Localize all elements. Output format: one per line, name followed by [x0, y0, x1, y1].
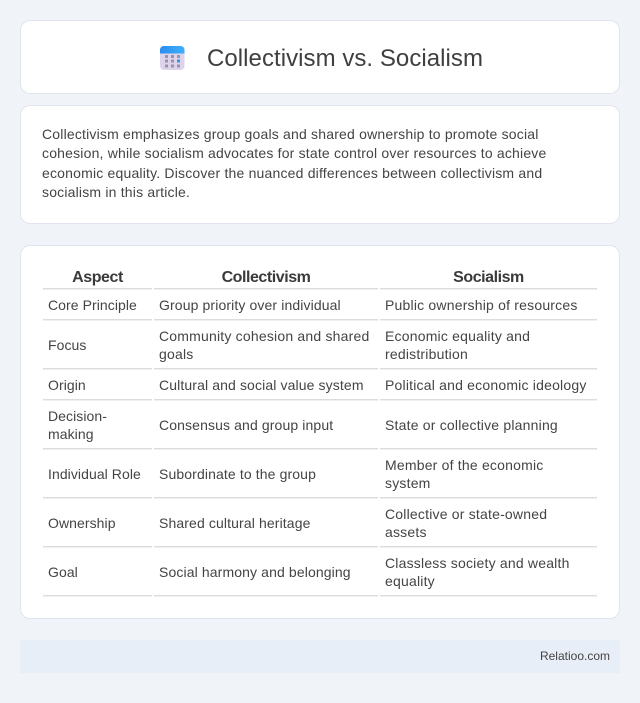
title: Collectivism vs. Socialism — [207, 45, 483, 72]
row: goal — [48, 555, 570, 589]
row: decision-making — [48, 408, 558, 442]
icon: calendar — [160, 46, 184, 70]
row: ownership: Ownership — [48, 515, 116, 531]
intro text: Collectivism emphasizes group goals and shared ownership to promote social — [42, 126, 539, 142]
row: goal: Classless society and wealth — [385, 555, 570, 571]
row: goal: Goal — [48, 564, 78, 580]
row: individual role: Individual Role — [48, 466, 141, 482]
row: decision-making: Consensus and group input — [159, 417, 333, 433]
row: focus: Economic equality and — [385, 328, 530, 344]
panel: introduction — [20, 105, 620, 224]
footer bar — [20, 640, 620, 673]
table header: Collectivism — [222, 269, 310, 286]
row: ownership: Shared cultural heritage — [159, 515, 311, 531]
table header: Aspect — [72, 269, 123, 286]
row: goal: equality — [385, 573, 435, 589]
row: origin: Origin — [48, 377, 86, 393]
row: ownership: Collective or state-owned — [385, 506, 547, 522]
row: individual role: Subordinate to the group — [159, 466, 316, 482]
row: goal: Social harmony and belonging — [159, 564, 351, 580]
row: individual role: Member of the economic — [385, 457, 543, 473]
row: focus — [48, 328, 530, 362]
row: core principle — [48, 297, 578, 313]
row: focus: goals — [159, 346, 193, 362]
table header: Socialism — [453, 269, 524, 286]
row: core principle: Core Principle — [48, 297, 137, 313]
row: individual role: system — [385, 475, 431, 491]
row: decision-making: State or collective planning — [385, 417, 558, 433]
row: origin — [48, 377, 587, 393]
row: focus: redistribution — [385, 346, 468, 362]
row: ownership: assets — [385, 524, 427, 540]
row: focus: Focus — [48, 337, 86, 353]
row: core principle: Public ownership of resources — [385, 297, 578, 313]
row: individual role — [48, 457, 543, 491]
panel: title header — [20, 20, 620, 94]
row: decision-making: making — [48, 426, 94, 442]
row: origin: Political and economic ideology — [385, 377, 587, 393]
row: focus: Community cohesion and shared — [159, 328, 369, 344]
row: decision-making: Decision- — [48, 408, 107, 424]
footer credit: Relatioo.com — [540, 649, 610, 663]
intro text: cohesion, while socialism advocates for state control over resources to achieve — [42, 145, 546, 161]
intro text — [42, 126, 546, 200]
comparison table — [43, 269, 597, 597]
row: core principle: Group priority over individual — [159, 297, 341, 313]
row: ownership — [48, 506, 547, 540]
intro text: socialism in this article. — [42, 184, 190, 200]
row: origin: Cultural and social value system — [159, 377, 364, 393]
table header — [72, 269, 524, 286]
intro text: economic equality. Discover the nuanced differences between collectivism and — [42, 165, 542, 181]
panel: comparison table — [20, 245, 620, 619]
